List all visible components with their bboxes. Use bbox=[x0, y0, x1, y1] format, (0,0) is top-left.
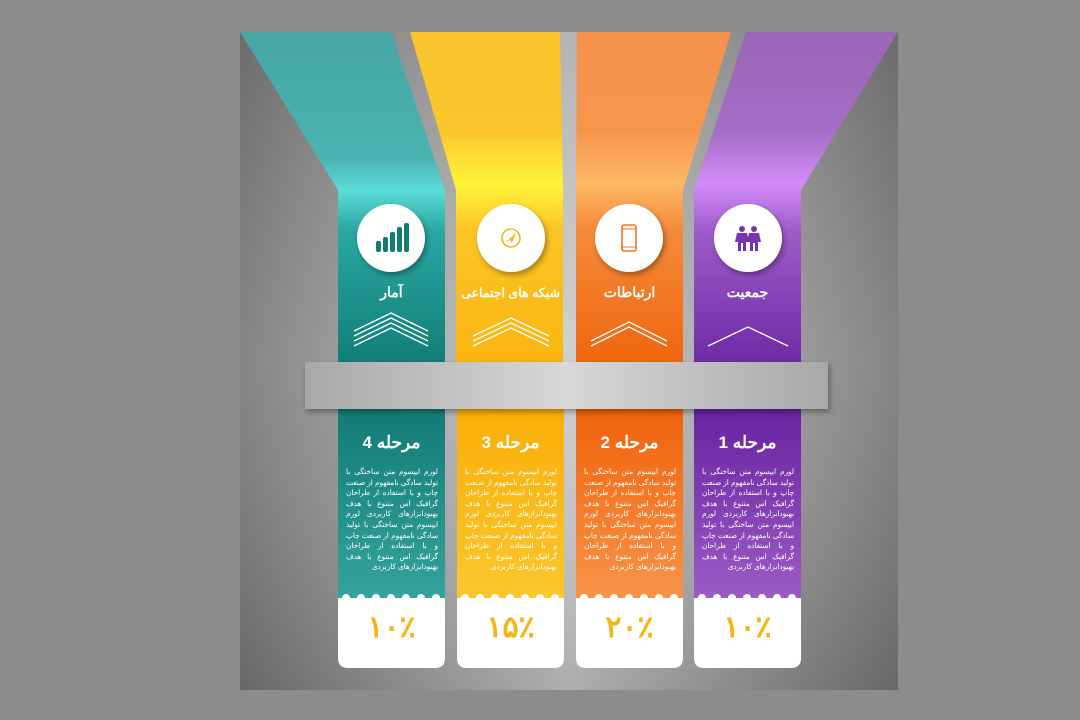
text: stage 2: لورم ایپسوم متن ساختگی با تولید سادگی نامفهوم از صنعت چاپ و با استفاده از طراحان گرافیک اس متنوع با هدف بهبودابزارهای کاربردی لورم ایپسوم متن ساختگی با تولید سادگی نامفهوم از صنعت چاپ و با استفاده از طراحان گرافیک اس متنوع با هدف بهبودابزارهای کاربردی bbox=[584, 467, 676, 571]
heading: مرحله 2: مرحله 2 bbox=[601, 433, 658, 452]
ribbon orange bbox=[576, 32, 731, 362]
text: stage 3: لورم ایپسوم متن ساختگی با تولید سادگی نامفهوم از صنعت چاپ و با استفاده از طراحان گرافیک اس متنوع با هدف بهبودابزارهای کاربردی لورم ایپسوم متن ساختگی با تولید سادگی نامفهوم از صنعت چاپ و با استفاده از طراحان گرافیک اس متنوع با هدف بهبودابزارهای کاربردی bbox=[465, 467, 557, 571]
title: آمار: آمار bbox=[380, 284, 403, 300]
icon: bars bbox=[376, 223, 409, 252]
percent 10: ۱۰٪ bbox=[723, 611, 772, 644]
title: شبکه های اجتماعی: شبکه های اجتماعی bbox=[461, 286, 560, 300]
icon: people bbox=[735, 226, 761, 251]
heading: مرحله 4: مرحله 4 bbox=[363, 433, 420, 452]
ribbon yellow bbox=[410, 32, 563, 362]
title: ارتباطات: ارتباطات bbox=[604, 284, 655, 300]
percent 10: ۱۰٪ bbox=[367, 611, 416, 644]
heading: مرحله 3: مرحله 3 bbox=[482, 433, 539, 452]
percent 15: ۱۵٪ bbox=[486, 611, 535, 644]
icon circles bbox=[357, 204, 782, 272]
ribbon purple bbox=[694, 32, 898, 362]
icon: compass bbox=[502, 229, 520, 247]
heading: مرحله 1: مرحله 1 bbox=[719, 433, 776, 452]
lower columns bbox=[338, 405, 801, 605]
ribbon teal bbox=[240, 32, 445, 362]
text: stage 1: لورم ایپسوم متن ساختگی با تولید سادگی نامفهوم از صنعت چاپ و با استفاده از طراحان گرافیک اس متنوع با هدف بهبودابزارهای کاربردی لورم ایپسوم متن ساختگی با تولید سادگی نامفهوم از صنعت چاپ و با استفاده از طراحان گرافیک اس متنوع با هدف بهبودابزارهای کاربردی bbox=[702, 467, 794, 571]
title: جمعیت: جمعیت bbox=[727, 284, 768, 300]
percent 20: ۲۰٪ bbox=[605, 611, 654, 644]
chevrons bbox=[354, 313, 788, 346]
text: stage 4: لورم ایپسوم متن ساختگی با تولید سادگی نامفهوم از صنعت چاپ و با استفاده از طراحان گرافیک اس متنوع با هدف بهبودابزارهای کاربردی لورم ایپسوم متن ساختگی با تولید سادگی نامفهوم از صنعت چاپ و با استفاده از طراحان گرافیک اس متنوع با هدف بهبودابزارهای کاربردی bbox=[346, 467, 438, 571]
icon: phone bbox=[622, 225, 636, 251]
white cards bbox=[338, 594, 801, 668]
gray band bbox=[305, 362, 828, 409]
